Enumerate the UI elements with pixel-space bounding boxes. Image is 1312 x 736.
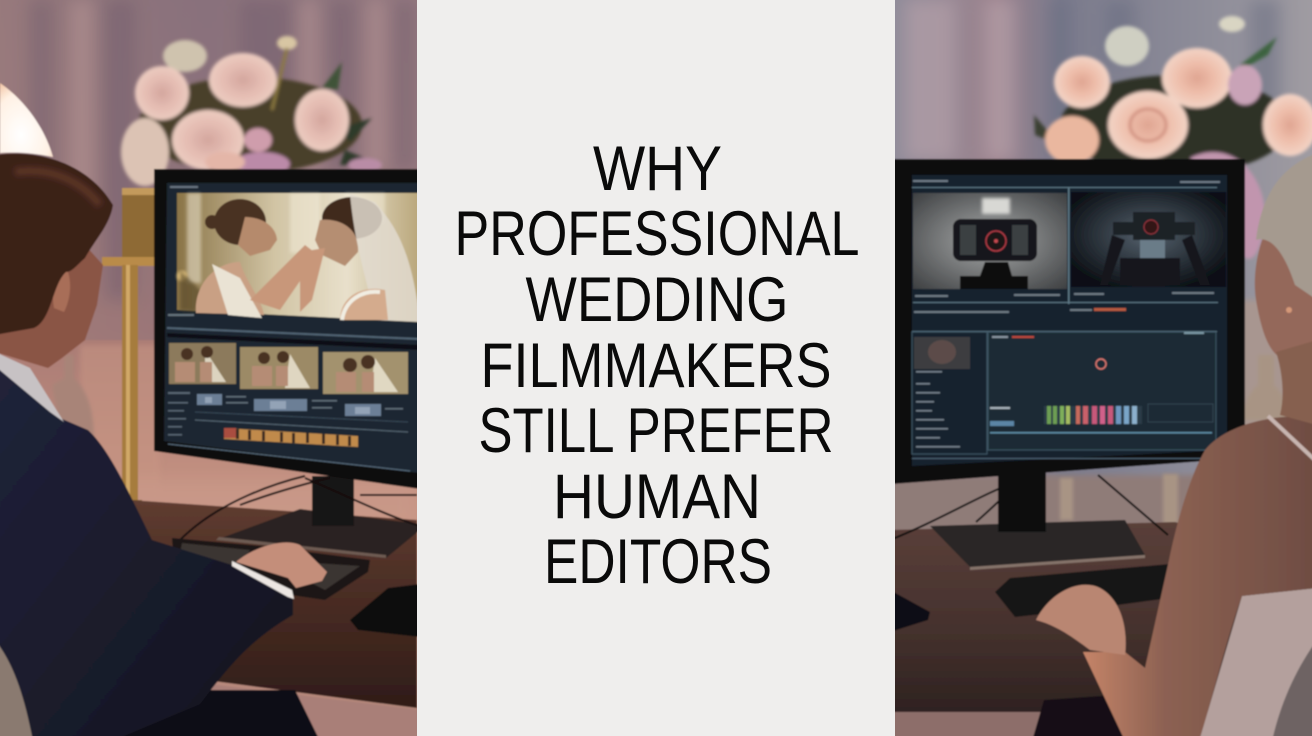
panel: right photo of female editor at desk bbox=[890, 0, 1312, 736]
top garment bbox=[1199, 588, 1312, 736]
right monitor bbox=[892, 159, 1245, 484]
male editor figure bbox=[0, 153, 327, 736]
title: STILL PREFER bbox=[478, 396, 834, 466]
right monitor cables bbox=[890, 475, 1168, 540]
glass vase bbox=[52, 355, 94, 442]
color grade bars bbox=[1044, 406, 1142, 424]
title: FILMMAKERS bbox=[480, 331, 832, 401]
right vases bbox=[1060, 355, 1288, 526]
right curtain background bbox=[890, 0, 1312, 736]
icon: glowing lamp shade bbox=[0, 83, 53, 157]
earring bbox=[1286, 307, 1292, 313]
right smartphone bbox=[890, 590, 930, 632]
title bbox=[454, 134, 860, 597]
sleeve cuff bbox=[232, 561, 294, 599]
timeline clips bbox=[168, 392, 410, 471]
back and arm bbox=[1083, 417, 1312, 736]
panel: center title column bbox=[417, 0, 895, 736]
neck and face bbox=[0, 245, 103, 368]
bride on left bbox=[196, 262, 264, 315]
chair edge bbox=[0, 640, 33, 736]
right desk bbox=[890, 522, 1312, 712]
smartphone on desk bbox=[350, 584, 420, 637]
suit jacket bbox=[0, 360, 293, 736]
camera preview right bbox=[1071, 192, 1226, 287]
female editor figure bbox=[1032, 153, 1312, 736]
title: WEDDING bbox=[526, 265, 788, 335]
left keyboard bbox=[172, 538, 370, 600]
blonde hair bbox=[1256, 153, 1312, 300]
left curtain and wall background bbox=[0, 0, 420, 736]
left monitor bbox=[154, 169, 420, 489]
right floor strip bbox=[890, 712, 1312, 736]
bride on right bbox=[322, 197, 382, 239]
dark trousers under desk bbox=[108, 690, 320, 736]
right monitor stand bbox=[930, 472, 1145, 570]
right flower bouquet bbox=[1034, 16, 1312, 259]
thumbnail filmstrip bbox=[169, 343, 408, 394]
colored timeline bar bbox=[224, 428, 358, 447]
title: WHY bbox=[593, 134, 722, 204]
white shirt collar bbox=[0, 352, 64, 422]
hair bbox=[0, 153, 113, 335]
preview captions bbox=[914, 292, 1214, 313]
title: HUMAN bbox=[553, 462, 761, 532]
wooden desk bbox=[115, 500, 417, 708]
left flower bouquet bbox=[121, 36, 382, 186]
hand on keyboard bbox=[236, 542, 327, 588]
timeline panel with red playhead bbox=[988, 332, 1216, 450]
header bar bbox=[913, 180, 1220, 183]
caption strip bbox=[167, 314, 420, 350]
hand on keyboard bbox=[1036, 585, 1126, 655]
floor strip bbox=[112, 672, 420, 736]
neck and head bbox=[1255, 200, 1312, 360]
dark trousers bbox=[1032, 695, 1150, 736]
title: EDITORS bbox=[544, 527, 772, 597]
ear bbox=[53, 271, 70, 312]
monitor cables bbox=[180, 476, 417, 540]
camera preview left bbox=[913, 193, 1067, 289]
panel: left photo of male editor at desk bbox=[0, 0, 420, 736]
main wedding video preview bbox=[177, 193, 420, 322]
panel list bbox=[912, 332, 987, 454]
title: PROFESSIONAL bbox=[454, 199, 860, 269]
right keyboard bbox=[995, 564, 1170, 617]
left monitor stand bbox=[216, 476, 420, 558]
brass lamp post bbox=[102, 188, 154, 514]
strap bbox=[1268, 416, 1312, 462]
chair edge bbox=[1272, 640, 1312, 736]
